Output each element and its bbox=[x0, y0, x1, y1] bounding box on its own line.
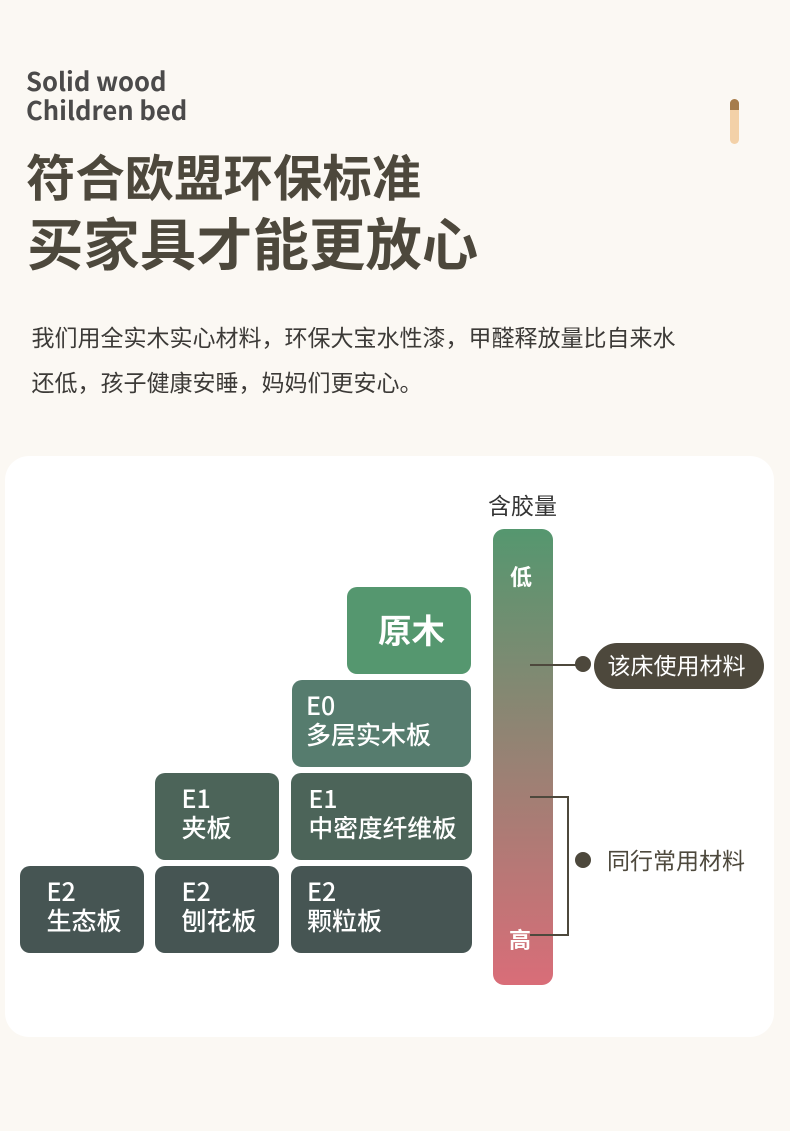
heading: English subtitle bbox=[26, 62, 187, 128]
text block: description: 我们用全实木实心材料，环保大宝水性漆，甲醛释放量比自来水 bbox=[32, 319, 676, 353]
marker: industry material bbox=[575, 852, 591, 868]
text block: description: 还低，孩子健康安睡，妈妈们更安心。 bbox=[32, 364, 422, 398]
gradient bar: glue content scale bbox=[493, 529, 553, 985]
block: E2 ecological board bbox=[20, 866, 144, 953]
block: raw wood: 原木 bbox=[378, 604, 445, 653]
text block: description bbox=[32, 319, 676, 398]
block: E1 plywood: 夹板 bbox=[182, 809, 232, 845]
block: E1 medium density fibreboard: E1 bbox=[308, 780, 337, 816]
callout: this bed material: 该床使用材料 bbox=[608, 647, 746, 681]
block: E1 medium density fibreboard: 中密度纤维板 bbox=[308, 809, 457, 845]
bracket: industry material range bbox=[530, 796, 569, 936]
block: E2 ecological board: E2 bbox=[46, 873, 76, 909]
block: E2 granule board: E2 bbox=[307, 873, 336, 909]
heading: English subtitle: Children bed bbox=[26, 91, 187, 128]
block: E0 multilayer board: 多层实木板 bbox=[306, 716, 431, 752]
icon: scroll indicator bbox=[730, 99, 739, 144]
marker: this bed material bbox=[575, 656, 591, 672]
title: line two: 买家具才能更放心 bbox=[27, 201, 478, 282]
block: E0 multilayer board: E0 bbox=[306, 687, 335, 723]
heading: English subtitle: Solid wood bbox=[26, 62, 167, 99]
label: low: 低 bbox=[510, 560, 532, 592]
block: E2 particle board bbox=[155, 866, 279, 953]
block: E1 plywood: E1 bbox=[182, 780, 211, 816]
callout: this bed material bbox=[594, 643, 764, 689]
block: E1 plywood bbox=[155, 773, 279, 860]
block: E2 granule board: 颗粒板 bbox=[307, 902, 382, 938]
title: line one: 符合欧盟环保标准 bbox=[26, 140, 421, 211]
label: glue content: 含胶量 bbox=[488, 487, 557, 521]
block: E0 multilayer board bbox=[292, 680, 471, 767]
block: E2 particle board: E2 bbox=[182, 873, 211, 909]
panel: material comparison bbox=[5, 456, 774, 1037]
block: raw wood bbox=[347, 587, 471, 674]
block: E2 ecological board: 生态板 bbox=[46, 902, 122, 938]
block: E2 granule board bbox=[291, 866, 472, 953]
block: E1 medium density fibreboard bbox=[291, 773, 472, 860]
block: E2 particle board: 刨花板 bbox=[182, 902, 257, 938]
label: industry material: 同行常用材料 bbox=[607, 842, 745, 876]
label: high: 高 bbox=[509, 923, 531, 955]
connector: this bed material bbox=[530, 664, 583, 666]
